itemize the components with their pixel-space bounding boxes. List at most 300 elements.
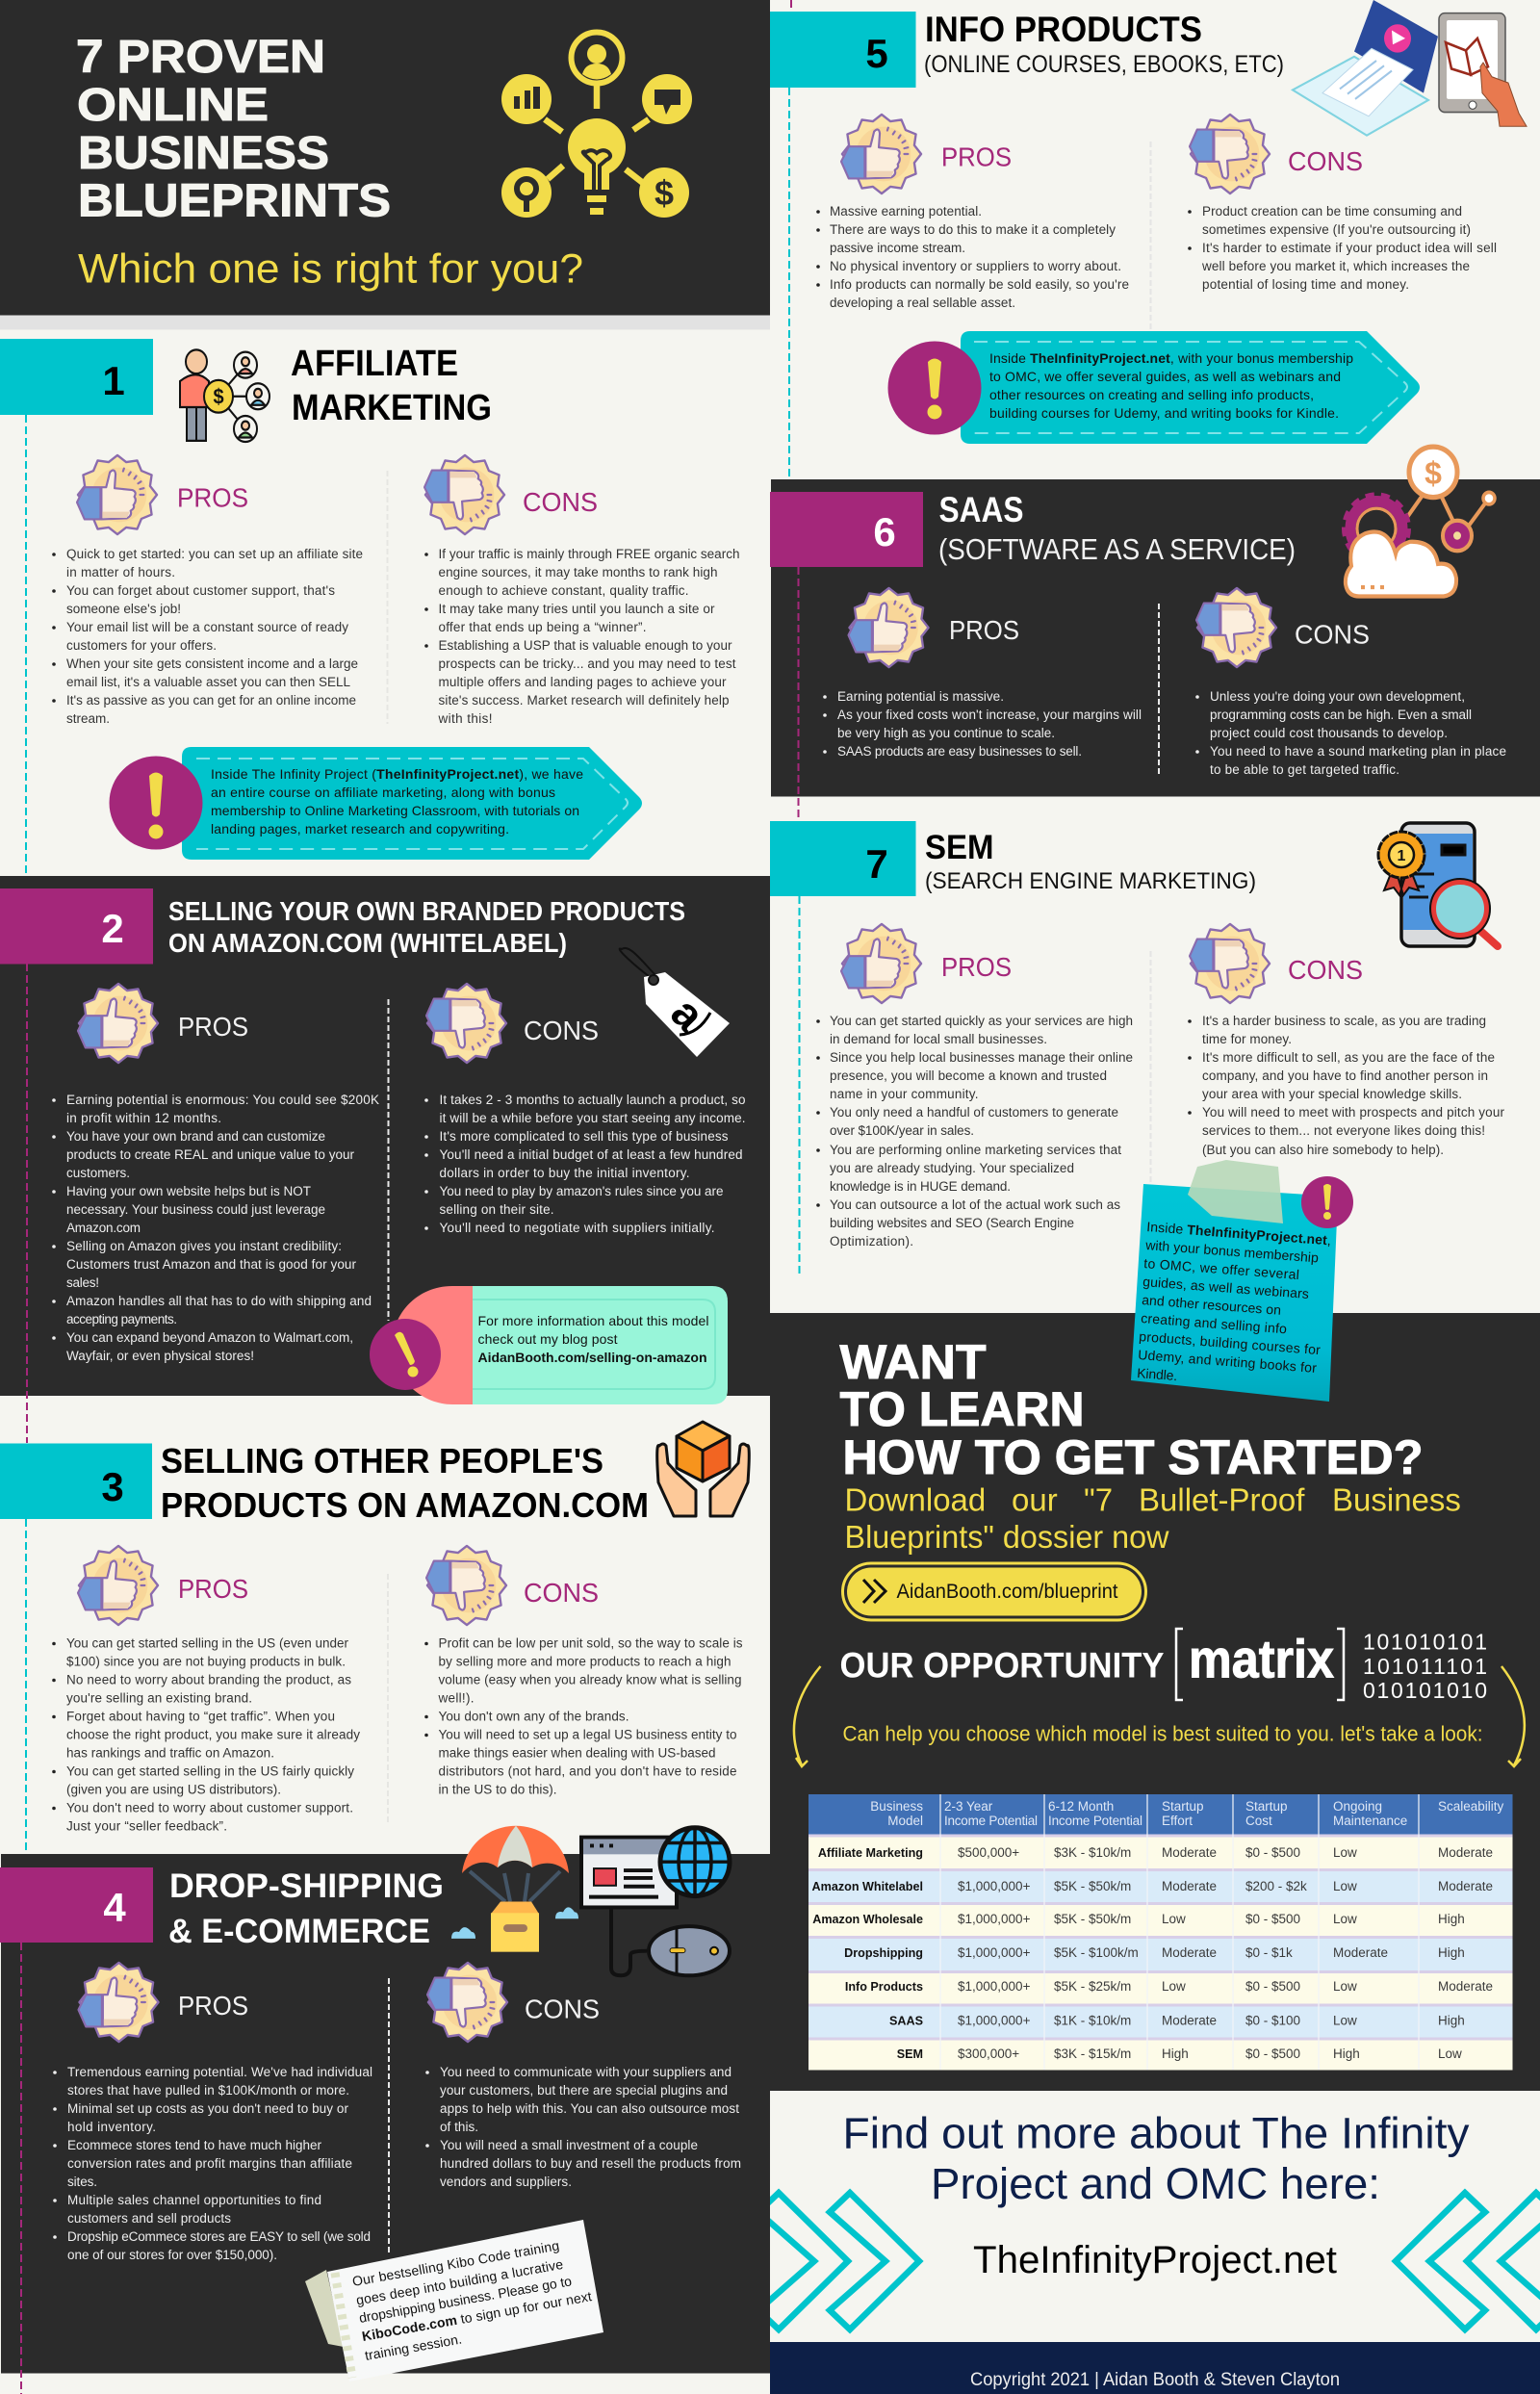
table header	[870, 1799, 1504, 1828]
footer band	[770, 2342, 1540, 2394]
number tab 2	[0, 888, 153, 965]
panel: 5 info products	[770, 0, 1527, 479]
arrows	[794, 1666, 1525, 1766]
pros list: presence, you will become a known and trusted	[830, 1068, 1107, 1083]
pros list: stores that have pulled in $100K/month or more.	[67, 2083, 349, 2098]
table header: Model	[887, 1814, 923, 1828]
panel: 4 drop-shipping	[0, 1826, 770, 2394]
callout: sticky note: Udemy, and writing books for	[1138, 1347, 1318, 1376]
table row: amazon whitelabel	[812, 1879, 1493, 1893]
download text: Download	[845, 1482, 986, 1517]
heading: want to learn	[839, 1335, 1423, 1484]
table row: dropshipping: Dropshipping	[844, 1946, 923, 1960]
cons label: CONS	[523, 487, 598, 517]
pros list: Quick to get started: you can set up an affiliate site	[66, 547, 363, 561]
cons list: prospects can be tricky... and you may need to test	[439, 656, 736, 671]
download text: our	[1012, 1482, 1058, 1517]
heading: SELLING OTHER PEOPLE'S	[161, 1441, 603, 1480]
pros list	[816, 204, 1129, 310]
title	[76, 32, 391, 227]
table row: amazon wholesale: $5K - $50k/m	[1054, 1912, 1131, 1926]
pros list: stream.	[66, 711, 110, 726]
cons list: enough to achieve constant, quality traffic.	[439, 583, 689, 598]
callout: info products resources: to OMC, we offer several guides, as well as webinars and	[989, 369, 1341, 384]
pros label: PROS	[178, 1574, 248, 1604]
table row: dropshipping: $0 - $1k	[1245, 1945, 1293, 1960]
cons list: You need to have a sound marketing plan in place	[1210, 744, 1506, 759]
table row: saas: Low	[1333, 2014, 1357, 2027]
pros list: It's as passive as you can get for an online income	[66, 693, 356, 708]
cons list: You will need to set up a legal US business entity to	[439, 1727, 737, 1742]
pros list	[52, 1636, 360, 1833]
callout: info products resources: Inside TheInfinityProject.net, with your bonus membership	[989, 350, 1353, 366]
pros list	[823, 689, 1142, 759]
pros list	[52, 1093, 379, 1363]
pros list: sites.	[67, 2175, 97, 2189]
callout: infinity project course: Inside The Infinity Project (TheInfinityProject.net), we have	[211, 766, 583, 782]
cons list: You will need to meet with prospects and pitch your	[1202, 1105, 1505, 1120]
table row: saas: $1K - $10k/m	[1054, 2014, 1131, 2027]
icon: thumbs up	[848, 588, 929, 667]
pros list: You can forget about customer support, that's	[66, 583, 335, 598]
cons list	[1195, 689, 1506, 777]
pros list: You are performing online marketing services that	[830, 1143, 1121, 1157]
pros list: over $100K/year in sales.	[830, 1123, 974, 1138]
callout: info products resources: building courses for Udemy, and writing books for Kindle.	[989, 405, 1339, 421]
heading: our opportunity matrix: 101011101	[1363, 1654, 1487, 1679]
cons list: It's harder to estimate if your product idea will sell	[1202, 241, 1497, 255]
cons list: your customers, but there are special plugins and	[440, 2083, 728, 2098]
download text	[845, 1482, 1461, 1555]
pros list: customers.	[66, 1166, 130, 1180]
pros list: accepting payments.	[66, 1312, 177, 1326]
heading: our opportunity matrix: 101010101	[1363, 1629, 1487, 1654]
callout: sticky note: and other resources on	[1142, 1292, 1282, 1318]
pros list: Customers trust Amazon and that is good for your	[66, 1257, 356, 1272]
number tab 4	[0, 1867, 153, 1943]
icon: parachute box	[451, 1826, 578, 1952]
cons list: distributors (not hard, and you don't have to reside	[439, 1763, 737, 1779]
callout: infinity project course: membership to Online Marketing Classroom, with tutorials on	[211, 803, 579, 818]
pros list: you're selling an existing brand.	[66, 1690, 252, 1706]
pros list: You can get started selling in the US fairly quickly	[66, 1763, 354, 1779]
icon: cloud, gear and coin network	[1345, 447, 1495, 597]
pros list: (given you are using US distributors).	[66, 1783, 281, 1796]
pros list: Having your own website helps but is NOT	[66, 1184, 311, 1198]
table header: Income Potential	[1048, 1814, 1142, 1828]
table row: saas	[889, 2014, 1465, 2027]
pros list: email list, it's a valuable asset you can then SELL	[66, 675, 350, 689]
pros list	[816, 1014, 1133, 1248]
pros list: You have your own brand and can customize	[66, 1129, 325, 1144]
number tab 6	[770, 492, 923, 567]
cons list: Establishing a USP that is valuable enough to your	[439, 638, 732, 653]
table row: info products: $5K - $25k/m	[1054, 1979, 1131, 1994]
download text: Blueprints" dossier now	[845, 1519, 1169, 1555]
icon: thumbs up	[77, 455, 157, 534]
pros list: sales!	[66, 1275, 99, 1290]
callout: info products resources	[887, 331, 1420, 444]
pros list: in demand for local small businesses.	[830, 1032, 1047, 1046]
pros label: PROS	[941, 952, 1012, 982]
website link: TheInfinityProject.net	[973, 2239, 1337, 2281]
pros list: You only need a handful of customers to generate	[830, 1105, 1118, 1120]
number tab 7: 7	[865, 841, 888, 887]
cons list: You need to communicate with your suppliers and	[440, 2065, 732, 2079]
pros list: You can expand beyond Amazon to Walmart.com,	[66, 1330, 353, 1345]
cons list: It's more difficult to sell, as you are the face of the	[1202, 1050, 1495, 1065]
icon: thumbs down	[1190, 924, 1270, 1003]
table header: Income Potential	[944, 1814, 1038, 1828]
download text: "7	[1084, 1482, 1113, 1517]
button: blueprint link: AidanBooth.com/blueprint	[897, 1581, 1118, 1603]
pros list: passive income stream.	[830, 241, 965, 255]
cons list: Profit can be low per unit sold, so the way to scale is	[439, 1636, 743, 1650]
icon: amazon price tag	[620, 948, 730, 1057]
table row: info products: Low	[1162, 1979, 1186, 1994]
heading: AFFILIATE	[291, 344, 458, 384]
table row: info products: Low	[1333, 1979, 1357, 1994]
pros list: Since you help local businesses manage their online	[830, 1050, 1133, 1065]
cons list: It's more complicated to sell this type of business	[439, 1129, 729, 1144]
callout: sticky note: to OMC, we offer several	[1143, 1255, 1300, 1282]
pros label: PROS	[178, 1012, 248, 1042]
icon: cloud, gear and coin network: $	[1424, 454, 1442, 491]
title: ONLINE	[77, 80, 269, 131]
callout: kibo code note: training session.	[364, 2330, 463, 2363]
pros list: Info products can normally be sold easily, so you're	[830, 277, 1129, 292]
panel: 7 sem	[770, 821, 1505, 1276]
icon: thumbs up	[78, 1963, 159, 2042]
table row: dropshipping: High	[1438, 1945, 1465, 1960]
cons list: multiple offers and landing pages to achieve your	[439, 675, 727, 689]
cons list: dollars in order to buy the initial inventory.	[439, 1166, 689, 1180]
table row: amazon wholesale	[812, 1912, 1465, 1926]
pros list: be very high as you continue to scale.	[837, 726, 1055, 740]
pros list: You can get started quickly as your services are high	[830, 1014, 1133, 1028]
cons list	[425, 2065, 741, 2189]
download text: Bullet-Proof	[1139, 1482, 1305, 1517]
cons list	[424, 1093, 745, 1235]
callout: sticky note: Kindle.	[1137, 1365, 1178, 1383]
table header: Startup	[1162, 1799, 1204, 1814]
callout: kibo code note	[305, 2220, 603, 2381]
pros list: Earning potential is massive.	[837, 689, 1004, 704]
heading: SAAS	[939, 490, 1024, 529]
table row: amazon wholesale: High	[1438, 1912, 1465, 1926]
cons list: Unless you're doing your own development,	[1210, 689, 1465, 704]
pros list: choose the right product, you make sure it already	[66, 1727, 360, 1742]
table row: amazon whitelabel: Moderate	[1438, 1879, 1493, 1893]
panel: 1 affiliate marketing	[0, 339, 739, 876]
pros list	[53, 2065, 372, 2262]
cons list: You don't own any of the brands.	[439, 1710, 629, 1723]
table row: info products: $1,000,000+	[958, 1979, 1031, 1994]
heading: want to learn: HOW TO GET STARTED?	[843, 1430, 1423, 1484]
pros list: You don't need to worry about customer support.	[66, 1800, 353, 1815]
table row: sem: High	[1162, 2046, 1189, 2061]
table row: amazon wholesale: $1,000,000+	[958, 1912, 1031, 1926]
title: BUSINESS	[78, 128, 329, 179]
number tab 5	[770, 12, 916, 88]
panel: 6 saas	[770, 447, 1540, 821]
cons list: You'll need to negotiate with suppliers initially.	[439, 1221, 714, 1235]
icon: laptop course	[1293, 0, 1438, 136]
cons list	[424, 547, 739, 726]
title: BLUEPRINTS	[78, 175, 391, 227]
icon: thumbs down	[424, 455, 504, 534]
number tab 1: 1	[102, 358, 125, 403]
icon: browser, globe and mouse	[581, 1828, 730, 1975]
cons list: volume (easy when you already know what is selling	[439, 1673, 741, 1686]
pros list: knowledge is in HUGE demand.	[830, 1179, 1011, 1194]
heading	[168, 1867, 444, 1950]
pros list: in matter of hours.	[66, 565, 175, 579]
heading: want to learn: TO LEARN	[839, 1382, 1084, 1436]
table row: dropshipping: Moderate	[1162, 1945, 1217, 1960]
icon: thumbs up	[78, 1546, 158, 1625]
heading: SEM	[925, 829, 993, 866]
cons list: site's success. Market research will definitely help	[439, 693, 730, 708]
cons list: potential of losing time and money.	[1202, 277, 1409, 292]
heading: PRODUCTS ON AMAZON.COM	[161, 1485, 649, 1525]
table row: affiliate marketing: Moderate	[1162, 1845, 1217, 1860]
cons list	[1188, 204, 1497, 292]
cons list: You will need a small investment of a couple	[440, 2138, 698, 2152]
table row: affiliate marketing: Moderate	[1438, 1845, 1493, 1860]
pros list: SAAS products are easy businesses to sell.	[837, 744, 1082, 759]
pros list: customers and sell products	[67, 2211, 231, 2226]
table row: sem: SEM	[897, 2047, 923, 2061]
table row: amazon wholesale: Low	[1333, 1912, 1357, 1926]
pros label: PROS	[178, 1991, 248, 2021]
heading: MARKETING	[292, 388, 492, 428]
pros list: $100) since you are not buying products in bulk.	[66, 1654, 346, 1669]
pros list	[52, 547, 363, 726]
pros list: necessary. Your business could just leverage	[66, 1202, 325, 1217]
pros list: You can get started selling in the US (even under	[66, 1636, 348, 1650]
table row: dropshipping: $1,000,000+	[958, 1945, 1031, 1960]
pros list: Optimization).	[830, 1234, 913, 1248]
icon: thumbs up	[841, 924, 921, 1003]
pros list: hold inventory.	[67, 2120, 156, 2134]
icon: left chevrons	[770, 2189, 924, 2333]
cons list: (But you can also hire somebody to help).	[1202, 1143, 1444, 1157]
number tab 7	[770, 821, 916, 896]
cons label: CONS	[1288, 146, 1363, 176]
heading: ON AMAZON.COM (WHITELABEL)	[168, 928, 567, 958]
table: opportunity matrix	[808, 1794, 1513, 2070]
table header: Startup	[1245, 1799, 1288, 1814]
cons label: CONS	[1288, 955, 1363, 985]
number tab 5: 5	[865, 31, 888, 76]
table header: Ongoing	[1333, 1799, 1382, 1814]
cons list: in the US to do this).	[439, 1783, 556, 1796]
heading: our opportunity matrix: OUR OPPORTUNITY	[839, 1646, 1165, 1685]
pros list: When your site gets consistent income and a large	[66, 656, 358, 671]
number tab 3: 3	[101, 1464, 124, 1509]
cons list: You need to play by amazon's rules since you are	[439, 1184, 724, 1198]
icon: affiliate person network	[180, 349, 270, 442]
heading: INFO PRODUCTS	[925, 10, 1202, 49]
table row: dropshipping: Moderate	[1333, 1945, 1388, 1960]
pros list: Dropship eCommece stores are EASY to sell (we sold	[67, 2229, 371, 2244]
number tab 3	[0, 1444, 152, 1519]
subtitle: Which one is right for you?	[78, 246, 583, 293]
table row: affiliate marketing: $0 - $500	[1245, 1845, 1300, 1860]
table row: amazon whitelabel: Moderate	[1162, 1879, 1217, 1893]
callout: infinity project course: landing pages, market research and copywriting.	[211, 821, 509, 837]
number tab 4: 4	[103, 1885, 126, 1930]
icon: thumbs up	[841, 115, 921, 193]
cons list: It's a harder business to scale, as you are trading	[1202, 1014, 1486, 1028]
pros list: No physical inventory or suppliers to worry about.	[830, 259, 1121, 273]
cons list: services to them... not everyone likes doing this!	[1202, 1123, 1485, 1138]
cons list: vendors and suppliers.	[440, 2175, 572, 2189]
icon: idea network: $	[654, 173, 674, 213]
icon: thumbs down	[426, 1546, 506, 1625]
subheading: (SEARCH ENGINE MARKETING)	[925, 868, 1256, 894]
cons list: your area with your special knowledge skills.	[1202, 1087, 1462, 1101]
subheading: (ONLINE COURSES, EBOOKS, ETC)	[924, 51, 1284, 78]
pros list: Minimal set up costs as you don't need to buy or	[67, 2101, 348, 2116]
heading: our opportunity matrix: 010101010	[1363, 1678, 1487, 1703]
icon: thumbs up	[78, 984, 158, 1063]
table row: affiliate marketing: Low	[1333, 1845, 1357, 1860]
cons label: CONS	[1295, 620, 1370, 649]
panel: 2 whitelabel	[0, 876, 770, 1443]
title: 7 PROVEN	[76, 32, 325, 83]
callout: kibo code note: Our bestselling Kibo Code training	[351, 2237, 560, 2289]
callout: sticky note: creating and selling info	[1141, 1310, 1288, 1336]
table row: sem: $3K - $15k/m	[1054, 2046, 1131, 2061]
pros list: Selling on Amazon gives you instant credibility:	[66, 1239, 342, 1253]
pros list: Wayfair, or even physical stores!	[66, 1349, 254, 1363]
pros list: Ecommece stores tend to have much higher	[67, 2138, 321, 2152]
icon: tablet with book and hand	[1439, 13, 1527, 126]
pros list: customers for your offers.	[66, 638, 217, 653]
callout: blog post	[370, 1286, 728, 1404]
table row: amazon wholesale: Amazon Wholesale	[812, 1913, 923, 1926]
table row: affiliate marketing: $3K - $10k/m	[1054, 1845, 1131, 1860]
cons list: well!).	[437, 1690, 474, 1706]
heading: find out more	[843, 2108, 1470, 2208]
callout: blog post: check out my blog post	[477, 1331, 618, 1347]
table row: sem	[897, 2046, 1462, 2061]
icon: hands holding box	[657, 1422, 749, 1516]
table row: info products: $0 - $500	[1245, 1979, 1300, 1994]
cons list: programming costs can be high. Even a small	[1210, 708, 1472, 722]
table header: Business	[870, 1799, 923, 1814]
pros list: Forget about having to “get traffic”. When you	[66, 1710, 335, 1723]
heading: DROP-SHIPPING	[169, 1867, 444, 1905]
icon: thumbs down	[1196, 588, 1276, 667]
callout: blog post: AidanBooth.com/selling-on-amazon	[477, 1350, 706, 1365]
callout: infinity project course: an entire course on affiliate marketing, along with bonus	[211, 785, 555, 800]
pros list: you are already studying. Your specialized	[830, 1161, 1074, 1175]
icon: thumbs down	[427, 1963, 507, 2042]
number tab 1	[0, 339, 153, 415]
cons list: project could cost thousands to develop.	[1210, 726, 1448, 740]
callout: infinity project course	[110, 747, 642, 860]
callout: kibo code note: goes deep into building a lucrative	[355, 2256, 564, 2307]
callout: sticky note	[1131, 1160, 1353, 1402]
cons list: offer that ends up being a “winner”.	[439, 620, 647, 634]
table row: amazon whitelabel: $1,000,000+	[958, 1879, 1031, 1893]
cons list	[424, 1636, 743, 1796]
icon: phone, medal and magnifier: 1	[1398, 848, 1406, 864]
table row: dropshipping	[844, 1945, 1465, 1960]
cons list: with this!	[437, 711, 493, 726]
table row: amazon wholesale: Low	[1162, 1912, 1186, 1926]
callout: blog post: For more information about this model	[477, 1313, 708, 1328]
cons list: make things easier when dealing with US-based	[439, 1746, 716, 1760]
cons label: CONS	[524, 1578, 599, 1608]
table row: amazon whitelabel: Amazon Whitelabel	[812, 1880, 923, 1893]
table row: sem: Low	[1438, 2046, 1462, 2061]
cons list: it will be a while before you start seeing any income.	[439, 1111, 745, 1125]
icon: affiliate person network: $	[213, 385, 224, 409]
pros list: You can outsource a lot of the actual work such as	[830, 1197, 1120, 1212]
table header: Cost	[1245, 1814, 1272, 1828]
cons list: of this.	[440, 2120, 478, 2134]
cons list: by selling more and more products to reach a high	[439, 1654, 732, 1669]
number tab 6: 6	[873, 509, 896, 554]
cons label: CONS	[524, 1016, 599, 1045]
heading: find out more: Find out more about The Infinity	[843, 2108, 1470, 2158]
pros list: conversion rates and profit margins than affiliate	[67, 2156, 352, 2171]
pros list: developing a real sellable asset.	[830, 296, 1015, 310]
table header: Maintenance	[1333, 1814, 1407, 1828]
pros list: name in your community.	[830, 1087, 978, 1101]
pros label: PROS	[949, 615, 1019, 645]
cons list: selling on their site.	[439, 1202, 554, 1217]
matrix intro text: Can help you choose which model is best suited to you. let's take a look:	[843, 1721, 1482, 1746]
cons list: sometimes expensive (If you're outsourcing it)	[1202, 222, 1471, 237]
heading: our opportunity matrix: matrix	[1189, 1629, 1334, 1688]
cons list: company, and you have to find another person in	[1202, 1068, 1488, 1083]
heading: SELLING YOUR OWN BRANDED PRODUCTS	[168, 896, 685, 926]
pros list: Tremendous earning potential. We've had individual	[67, 2065, 372, 2079]
cons list: If your traffic is mainly through FREE organic search	[439, 547, 739, 561]
table row: info products	[845, 1979, 1493, 1994]
table row: sem: $300,000+	[958, 2046, 1019, 2061]
pros list: has rankings and traffic on Amazon.	[66, 1746, 274, 1760]
cons list: to be able to get targeted traffic.	[1210, 762, 1399, 777]
cons list: engine sources, it may take months to rank high	[439, 565, 718, 579]
pros list: Earning potential is enormous: You could see $200K	[66, 1093, 379, 1107]
pros label: PROS	[941, 142, 1012, 171]
pros list: Amazon.com	[66, 1221, 141, 1235]
table row: saas: High	[1438, 2014, 1465, 2027]
cons list: You'll need a initial budget of at least a few hundred	[439, 1147, 743, 1162]
table row: amazon whitelabel: $200 - $2k	[1245, 1879, 1307, 1893]
table row: amazon wholesale: $0 - $500	[1245, 1912, 1300, 1926]
icon: phone, medal and magnifier	[1378, 823, 1498, 946]
callout: info products resources: other resources on creating and selling info products,	[989, 387, 1314, 402]
pros list: Your email list will be a constant source of ready	[66, 620, 348, 634]
cons list: Product creation can be time consuming and	[1202, 204, 1462, 219]
download text: Business	[1332, 1482, 1461, 1517]
table header: 2-3 Year	[944, 1799, 993, 1814]
table row: sem: $0 - $500	[1245, 2046, 1300, 2061]
table header: Effort	[1162, 1814, 1193, 1828]
icon: thumbs down	[1190, 115, 1270, 193]
pros list: Amazon handles all that has to do with shipping and	[66, 1294, 372, 1308]
callout: sticky note: guides, as well as webinars	[1142, 1274, 1309, 1301]
table header: 6-12 Month	[1048, 1799, 1114, 1814]
icon: thumbs down	[426, 984, 506, 1063]
